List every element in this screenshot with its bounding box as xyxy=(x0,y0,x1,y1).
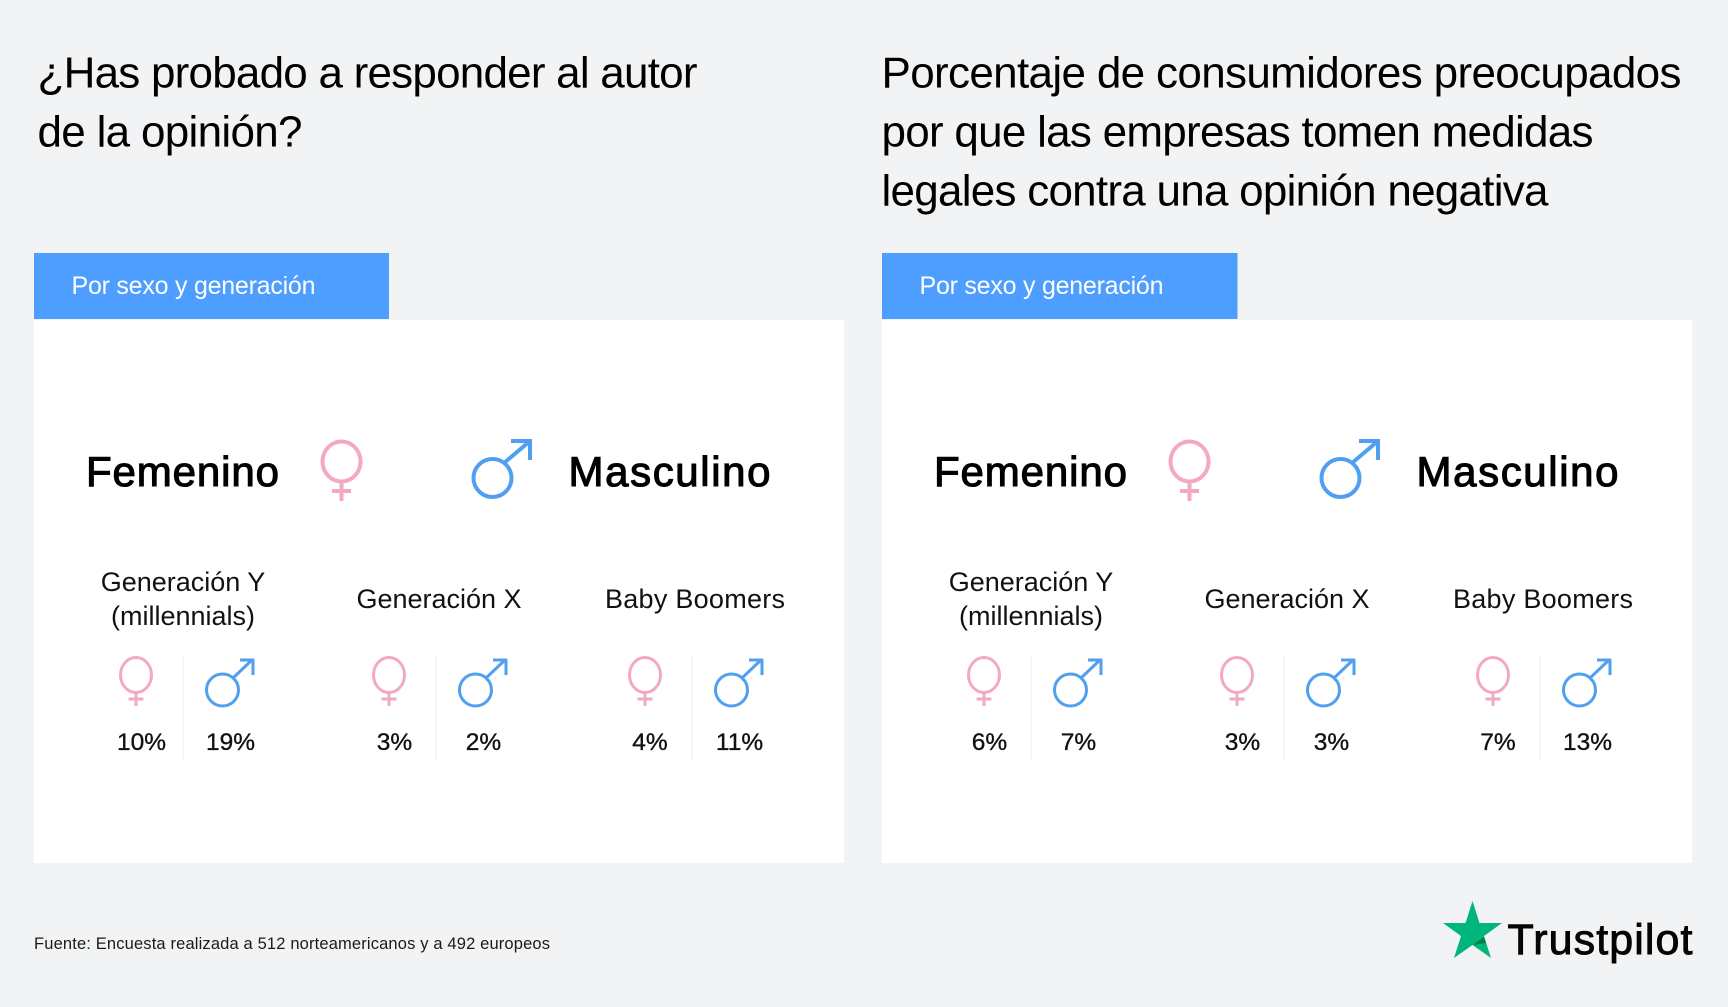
heading: left question: ¿Has probado a responder al autor xyxy=(38,48,698,98)
legend: femenino: Femenino xyxy=(934,448,1127,495)
group: baby boomers xyxy=(605,584,785,760)
group: baby boomers: Baby Boomers xyxy=(1453,584,1633,614)
legend: femenino xyxy=(86,442,360,501)
group: baby boomers: Baby Boomers xyxy=(605,584,785,614)
group: generación X: 3% xyxy=(1314,729,1349,756)
source note: Fuente: Encuesta realizada a 512 norteamericanos y a 492 europeos xyxy=(34,935,550,953)
group: generación X: 3% xyxy=(377,729,412,756)
group: generación Y: 7% xyxy=(1061,729,1096,756)
group: baby boomers xyxy=(1453,584,1633,760)
group: generación Y: 6% xyxy=(972,729,1007,756)
group: generación X: Generación X xyxy=(1204,584,1370,614)
panel: left responses by sex and generation xyxy=(34,253,844,863)
panel: right responses by sex and generation xyxy=(882,253,1692,863)
legend: masculino: Masculino xyxy=(568,448,770,495)
group: generación Y: (millennials) xyxy=(111,601,255,631)
legend: masculino: Masculino xyxy=(1416,448,1618,495)
group: baby boomers: 7% xyxy=(1480,729,1516,756)
legend: masculino xyxy=(474,439,770,497)
panel background xyxy=(34,320,844,863)
legend: femenino: Femenino xyxy=(86,448,279,495)
group: generación X xyxy=(356,584,522,760)
group: generación X xyxy=(1204,584,1370,760)
heading: right question: legales contra una opinión negativa xyxy=(882,166,1549,216)
group: baby boomers: 4% xyxy=(632,729,668,756)
panel background xyxy=(882,320,1692,863)
group: generación Y xyxy=(101,567,265,760)
group: generación Y: Generación Y xyxy=(949,567,1113,597)
group: generación Y: Generación Y xyxy=(101,567,265,597)
tab: por sexo y generación xyxy=(882,253,1238,319)
group: generación Y: 19% xyxy=(206,729,255,756)
heading: left question: de la opinión? xyxy=(38,108,302,156)
tab: por sexo y generación xyxy=(34,253,389,319)
legend: masculino xyxy=(1322,439,1618,497)
group: generación X: 3% xyxy=(1225,729,1260,756)
legend: femenino xyxy=(934,442,1208,501)
heading: left question xyxy=(38,48,698,156)
logo: Trustpilot: Trustpilot xyxy=(1508,916,1693,964)
logo: Trustpilot xyxy=(1443,901,1693,964)
group: generación X: 2% xyxy=(466,729,501,756)
group: generación Y: 10% xyxy=(117,729,166,756)
group: baby boomers: 11% xyxy=(716,729,763,756)
tab: por sexo y generación: Por sexo y generación xyxy=(72,272,316,300)
group: generación Y xyxy=(949,567,1113,760)
tab: por sexo y generación: Por sexo y generación xyxy=(920,272,1164,300)
heading: right question: por que las empresas tomen medidas xyxy=(882,108,1594,156)
group: generación X: Generación X xyxy=(356,584,522,614)
heading: right question: Porcentaje de consumidores preocupados xyxy=(882,48,1682,98)
group: generación Y: (millennials) xyxy=(959,601,1103,631)
heading: right question xyxy=(882,48,1682,216)
group: baby boomers: 13% xyxy=(1563,729,1612,756)
